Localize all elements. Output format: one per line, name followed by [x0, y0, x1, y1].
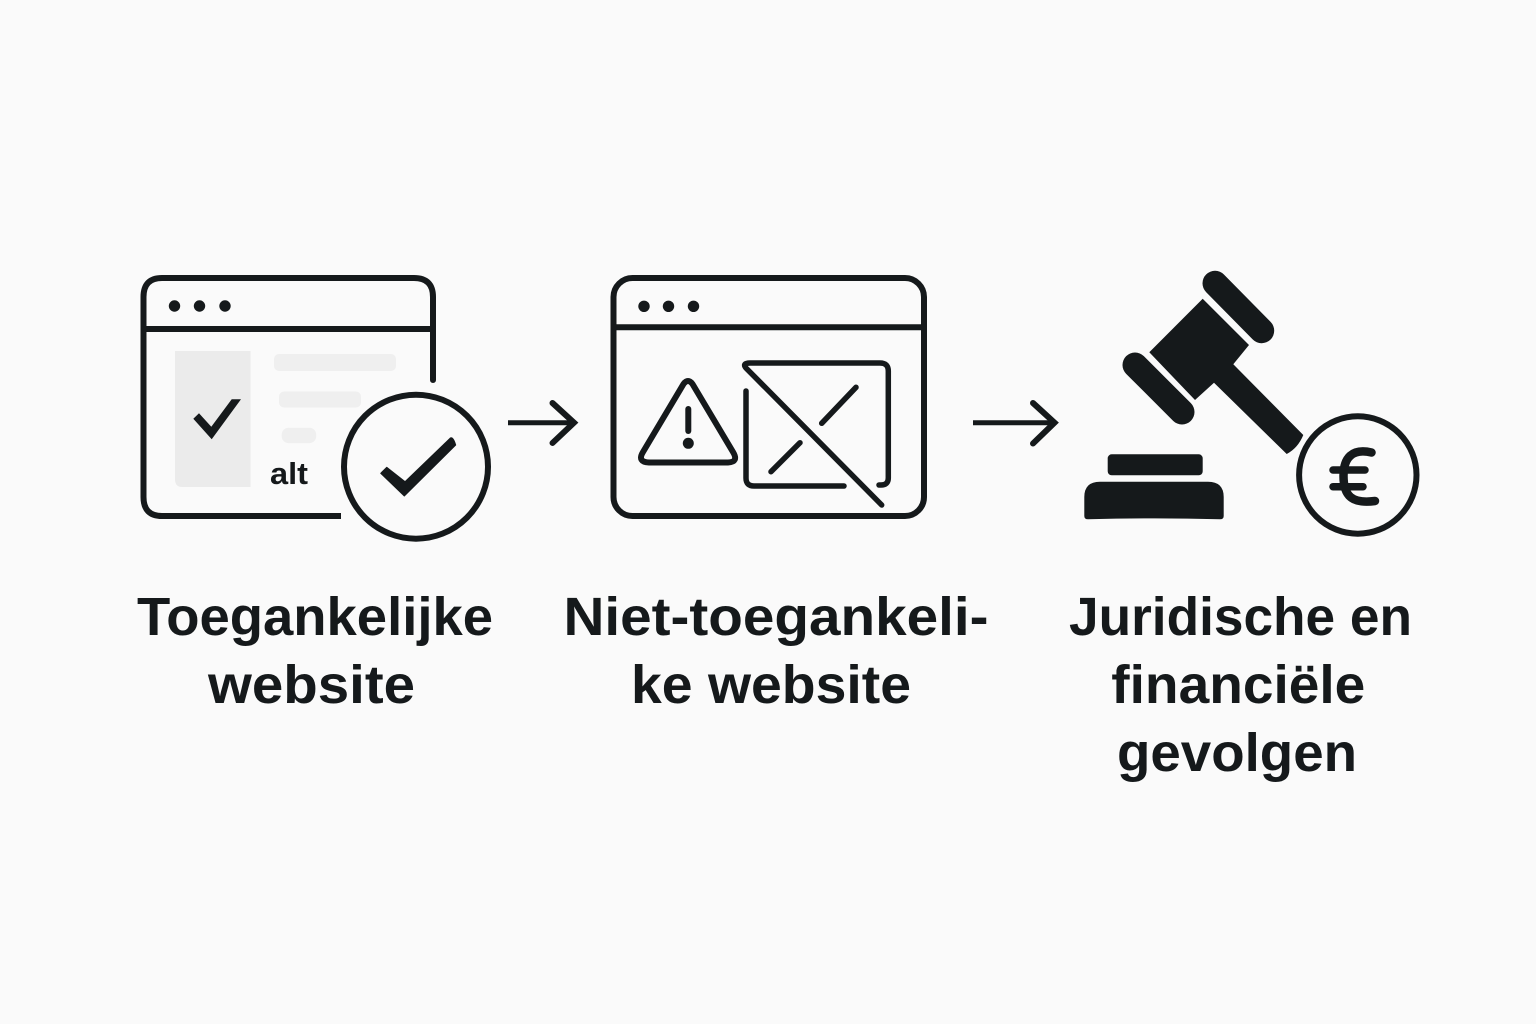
icon: euro coin — [1299, 416, 1417, 534]
arrow: second step — [973, 403, 1054, 444]
label: legal and financial consequences: financiële — [1111, 655, 1365, 715]
icon: accessible website browser window — [144, 278, 436, 516]
label: accessible website: Toegankelijke — [137, 587, 493, 647]
label: accessible website — [137, 587, 493, 715]
icon: judge gavel — [1084, 283, 1303, 519]
label: legal and financial consequences — [1069, 587, 1412, 783]
label: legal and financial consequences: gevolgen — [1117, 723, 1357, 783]
label: inaccessible website: Niet-toegankeli- — [564, 587, 988, 647]
label: inaccessible website — [564, 587, 988, 715]
arrow: first step — [508, 403, 574, 443]
icon: inaccessible website browser window — [614, 278, 924, 516]
label: inaccessible website: ke website — [631, 655, 911, 715]
label: legal and financial consequences: Juridische en — [1069, 587, 1412, 647]
icon: broken image — [745, 363, 888, 505]
icon: warning triangle — [641, 381, 735, 462]
icon: accessible website browser window: alt — [270, 456, 308, 491]
label: accessible website: website — [207, 655, 415, 715]
icon: check badge — [344, 395, 488, 539]
